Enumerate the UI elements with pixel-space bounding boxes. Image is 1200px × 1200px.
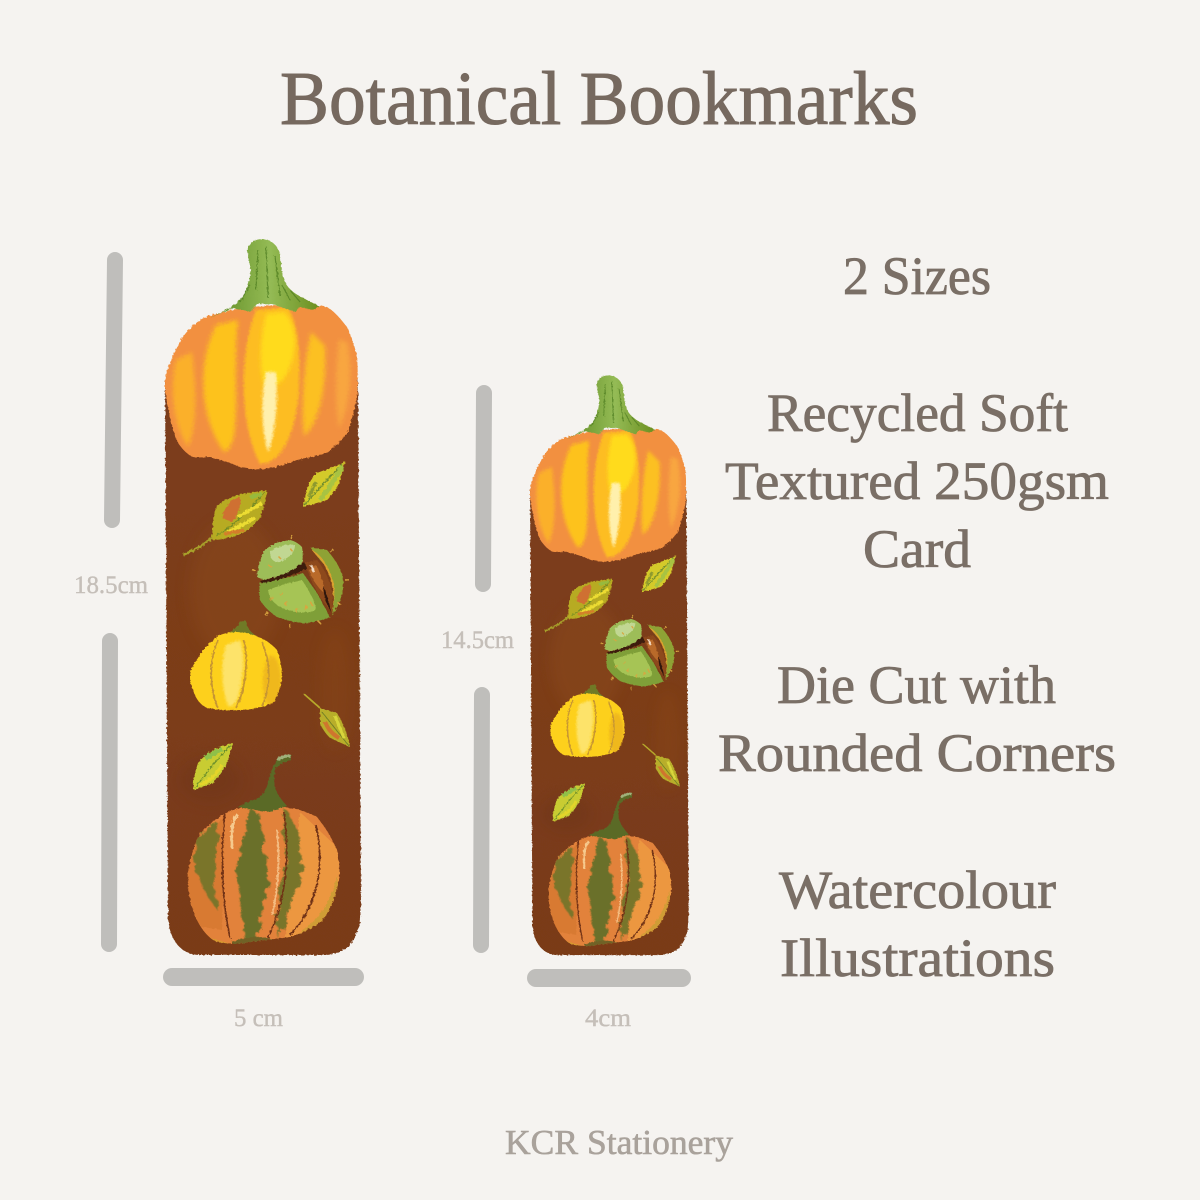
small bookmark — [526, 375, 692, 955]
feature: recycled card: Textured 250gsm — [725, 451, 1109, 511]
feature: die cut: Die Cut with — [777, 655, 1056, 715]
label: 14.5cm: 14.5cm — [441, 627, 515, 654]
feature: die cut — [718, 655, 1116, 783]
title: Botanical Bookmarks — [280, 57, 918, 141]
feature: watercolour: Watercolour — [779, 860, 1056, 920]
feature: die cut: Rounded Corners — [718, 723, 1116, 783]
small bookmark height bar — [473, 385, 492, 953]
feature: 2 Sizes: 2 Sizes — [843, 246, 991, 306]
label: 18.5cm: 18.5cm — [74, 572, 149, 599]
small bookmark width bar — [527, 969, 691, 987]
label: 4cm: 4cm — [585, 1005, 632, 1032]
feature: watercolour — [779, 860, 1056, 988]
feature: watercolour: Illustrations — [780, 928, 1055, 988]
large bookmark — [160, 239, 365, 955]
large bookmark width bar — [163, 968, 364, 986]
label: 5 cm: 5 cm — [234, 1005, 284, 1032]
brand footer: KCR Stationery — [505, 1123, 734, 1162]
large bookmark height bar — [101, 252, 123, 952]
feature: recycled card: Recycled Soft — [767, 383, 1068, 443]
feature: recycled card: Card — [863, 519, 971, 579]
feature: recycled card — [725, 383, 1109, 579]
